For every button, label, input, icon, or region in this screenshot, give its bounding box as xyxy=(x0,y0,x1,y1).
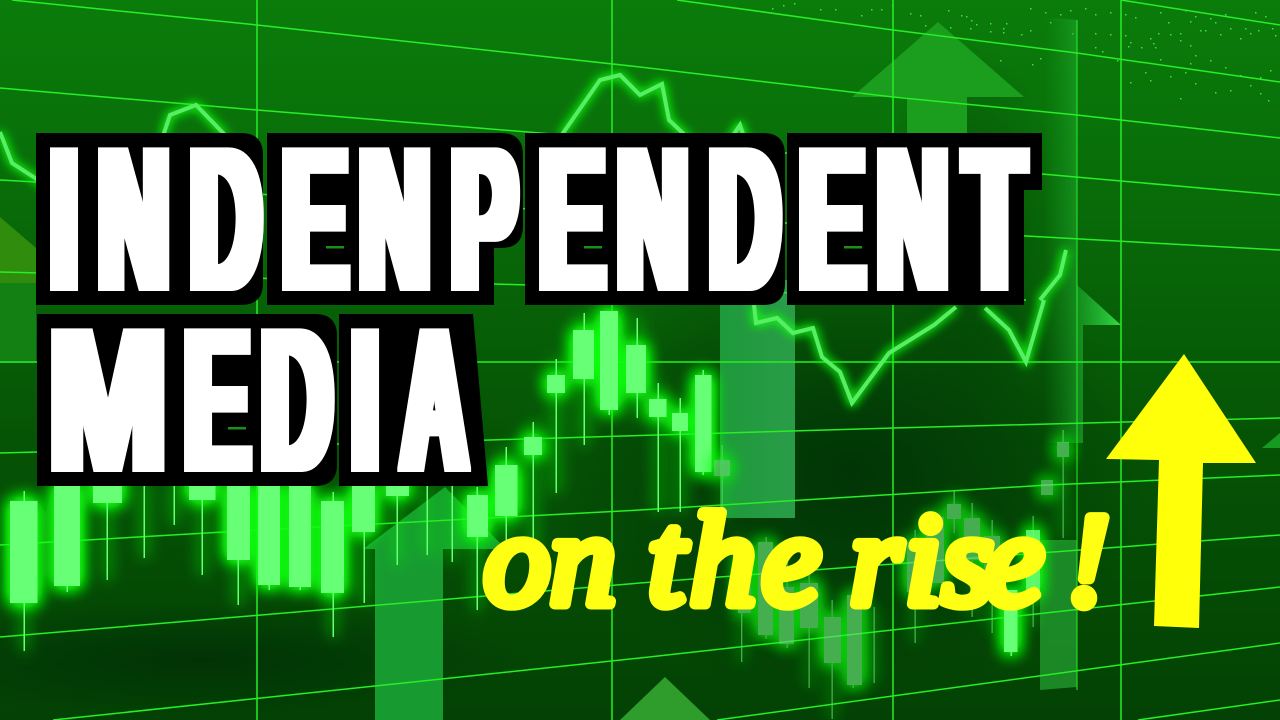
arrow: top centre xyxy=(852,22,1024,140)
backing: line two xyxy=(37,314,337,486)
backing: line one xyxy=(36,133,263,305)
heading: black backing panels xyxy=(36,133,1042,486)
notches of green between letter arms xyxy=(228,246,862,430)
script tagline: on the rise!: on the rise! xyxy=(484,486,1110,633)
heading line: independent: INDENPENDENT xyxy=(50,105,1024,332)
candlestick: bright lower right xyxy=(1004,530,1040,656)
candlesticks: bright group xyxy=(10,311,712,651)
heading line: media, EDI: EDI xyxy=(185,286,379,513)
price line glow xyxy=(0,75,1066,403)
arrow: right column upper xyxy=(1044,17,1121,443)
heading line: media, A: A xyxy=(402,287,467,514)
heading line: media, M: M xyxy=(49,287,167,514)
arrow: bottom left shaft xyxy=(363,487,506,720)
arrow: left edge shaft xyxy=(0,283,36,363)
arrow: bottom centre head xyxy=(620,677,710,720)
arrow: right column lower xyxy=(1040,540,1077,690)
scattered data dots xyxy=(772,3,1276,102)
icon: yellow up arrow xyxy=(1106,354,1256,628)
heading: white lettering xyxy=(49,105,1024,514)
arrow: far right head xyxy=(1262,433,1280,448)
arrow: left edge xyxy=(0,217,36,283)
candlesticks: dim group xyxy=(714,430,1069,719)
arrow: tall centre shaft xyxy=(720,280,795,518)
